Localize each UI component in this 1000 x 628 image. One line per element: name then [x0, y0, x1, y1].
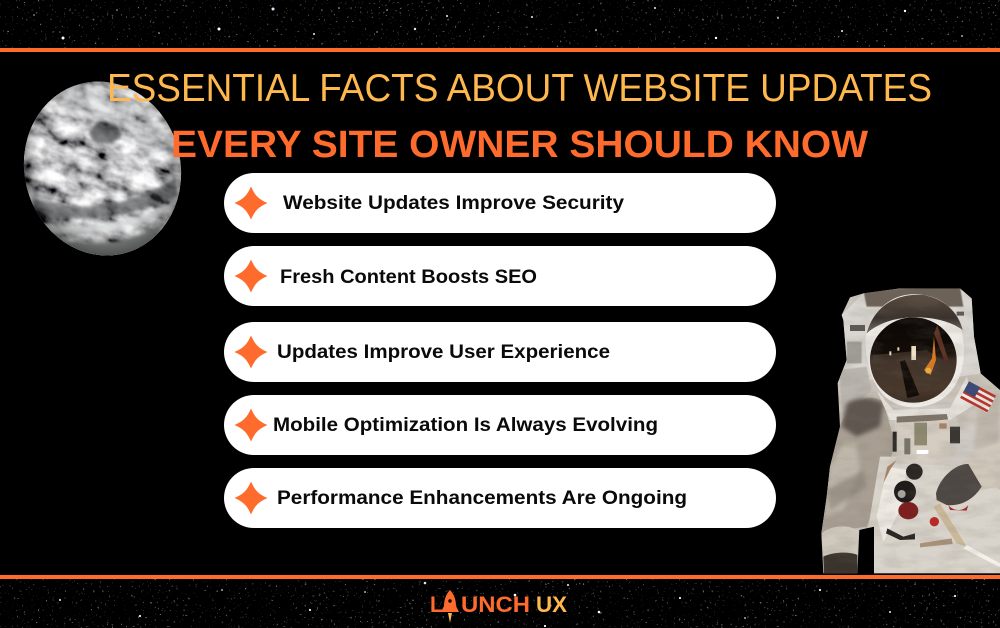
panel: fact 3: Updates Improve User Experience [277, 342, 610, 363]
logo: UNCH [461, 592, 530, 617]
right forearm [960, 443, 1000, 490]
panel: fact 1: Website Updates Improve Security [283, 193, 624, 214]
icon: rocket [441, 590, 459, 623]
panel: fact 5: Performance Enhancements Are Ongoing [277, 488, 687, 509]
icon: sparkle [234, 408, 268, 442]
helmet collar [877, 377, 977, 420]
flag patch [960, 381, 996, 413]
arm [821, 398, 895, 533]
visor reflection [873, 325, 957, 403]
icon: sparkle [234, 260, 268, 292]
panel: fact 3 [224, 322, 776, 382]
title [107, 67, 932, 166]
logo: L [430, 592, 443, 617]
panel: fact 2 [224, 246, 776, 306]
panel: fact 4 [224, 395, 776, 455]
backpack [838, 288, 981, 383]
title line 1: ESSENTIAL FACTS ABOUT WEBSITE UPDATES [107, 67, 932, 110]
astronaut glove: left [823, 553, 857, 573]
chest control unit [931, 419, 948, 421]
suit wrinkles [820, 287, 1000, 573]
hoses and straps [883, 460, 897, 483]
bottom orange rule [0, 575, 1000, 579]
helmet visor [870, 317, 957, 403]
astronaut suit base [820, 287, 1000, 573]
image: astronaut [820, 287, 1000, 573]
top orange rule [0, 48, 1000, 52]
panel: fact 2: Fresh Content Boosts SEO [280, 267, 537, 288]
icon: sparkle [234, 186, 268, 220]
icon: sparkle [234, 336, 268, 368]
panel: fact 1 [224, 173, 776, 233]
astronaut glove: right [936, 464, 982, 505]
panel: fact 4: Mobile Optimization Is Always Evolving [273, 415, 658, 436]
helmet shell [865, 294, 964, 407]
title line 2: EVERY SITE OWNER SHOULD KNOW [171, 124, 868, 166]
icon: sparkle [234, 482, 268, 514]
logo [430, 590, 567, 623]
torso [868, 457, 1000, 573]
panel: fact 5 [224, 468, 776, 528]
starfield: top strip [0, 0, 1000, 48]
logo: UX [536, 592, 567, 617]
image: earth [24, 82, 182, 256]
starfield: bottom strip [0, 579, 1000, 628]
